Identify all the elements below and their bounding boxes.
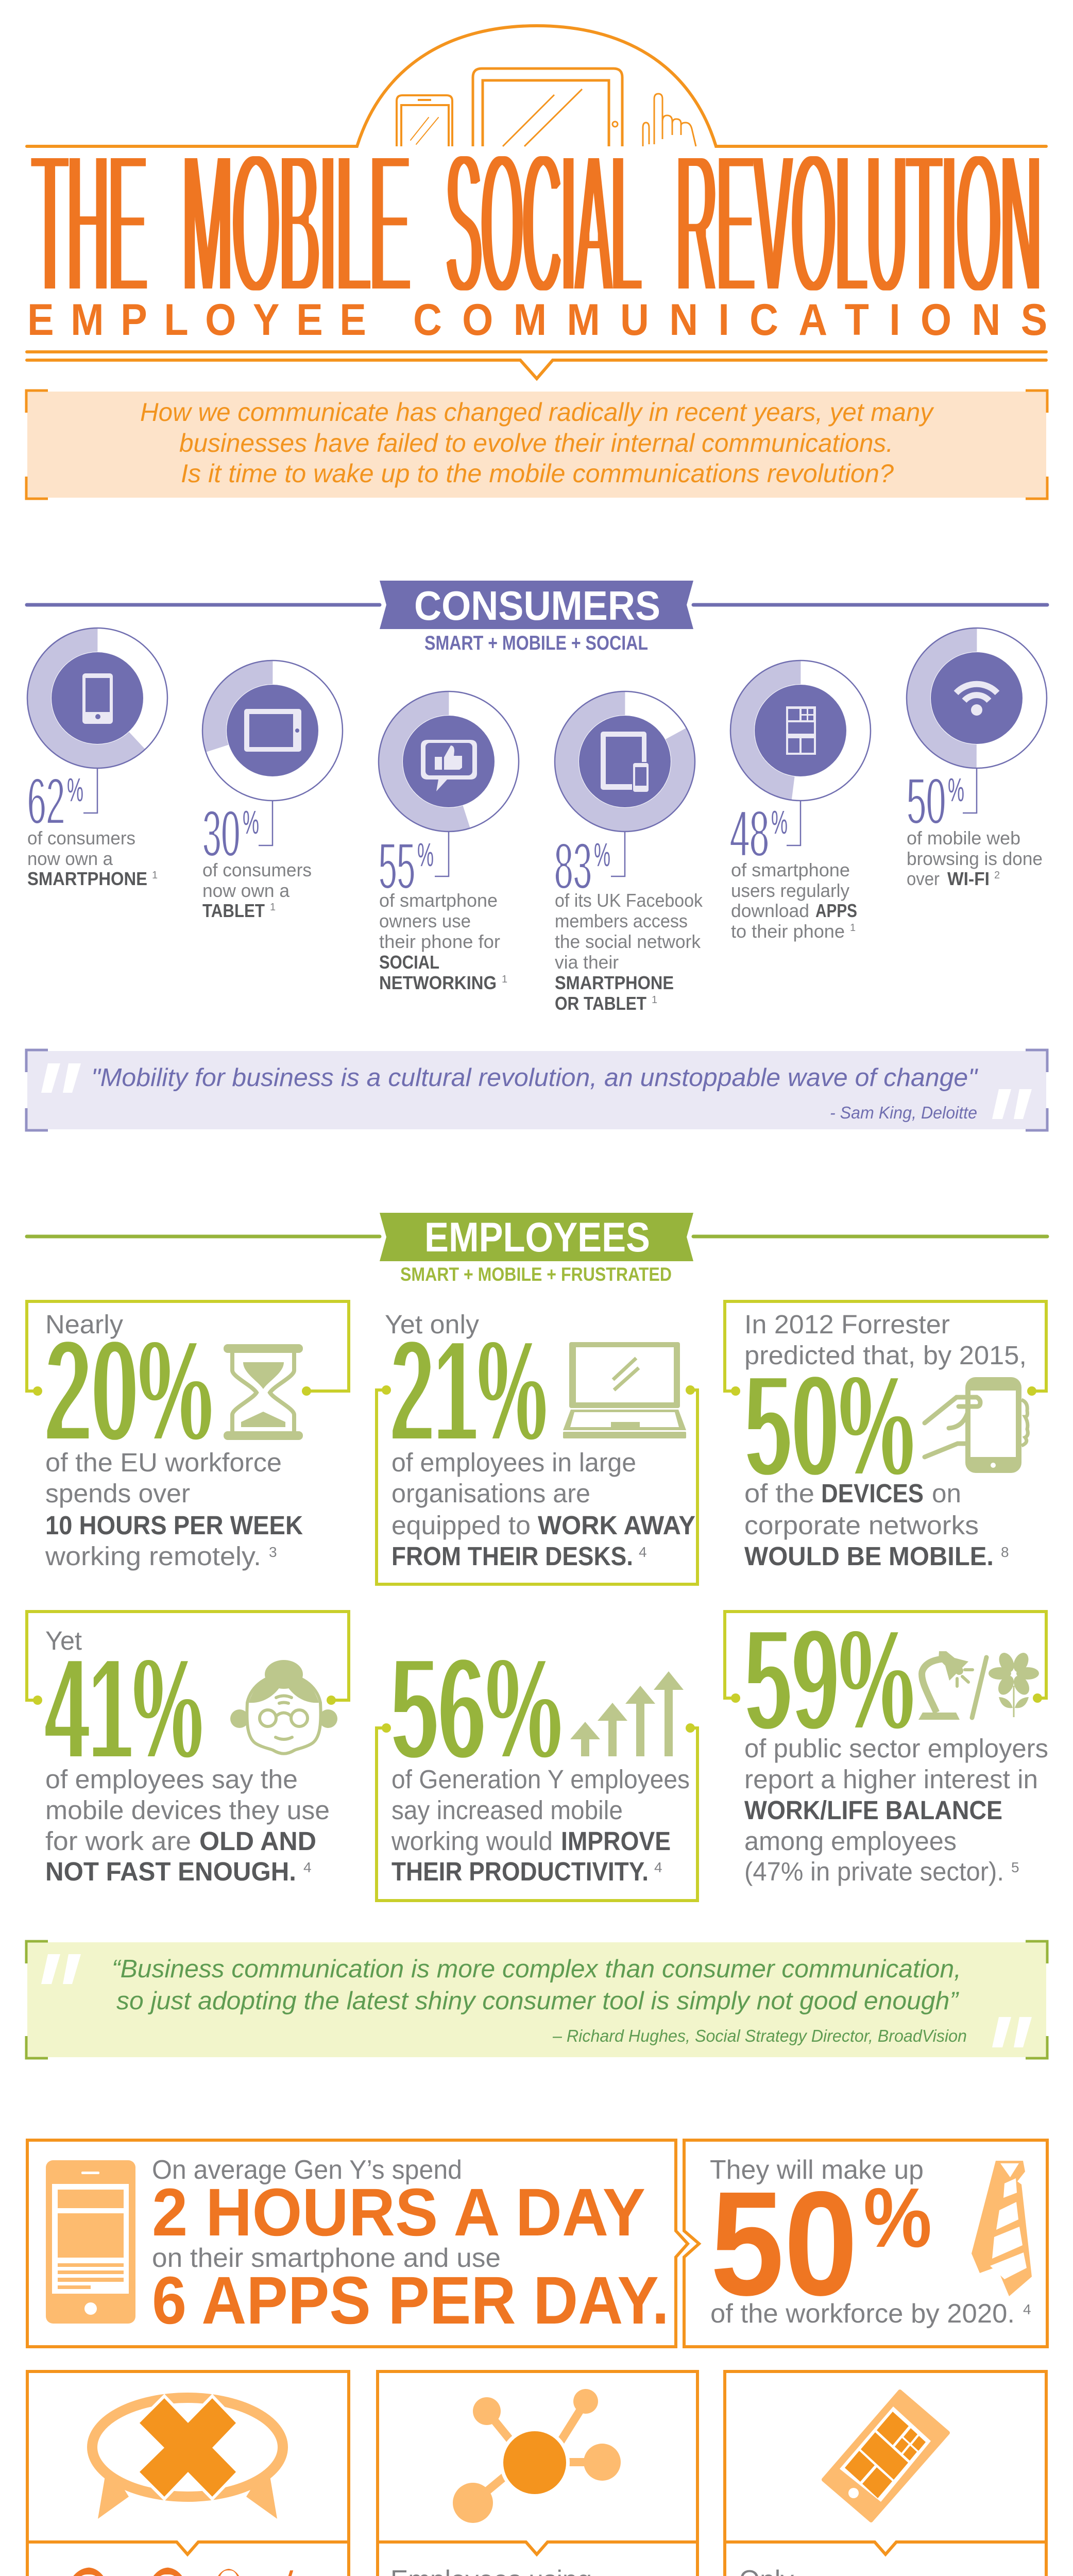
header icon: arch with phone, tablet and hand — [27, 26, 1046, 146]
intro text: businesses have failed to evolve their internal communications. — [179, 429, 893, 457]
card: 21%: Yet only — [385, 1310, 479, 1339]
card: 56%: working would — [391, 1826, 553, 1856]
stat: 83% facebook: % — [594, 836, 610, 873]
stat: 48% apps — [730, 660, 871, 942]
quote: Sam King: - Sam King, Deloitte — [830, 1103, 977, 1122]
stat: 30% tablet: 1 — [270, 902, 276, 913]
card: 20%: 3 — [269, 1544, 277, 1560]
subtitle — [27, 295, 1047, 345]
section heading: consumers: SMART + MOBILE + SOCIAL — [424, 632, 648, 654]
quote: Richard Hughes: so just adopting the latest shiny consumer tool is simply not good enough” — [116, 1987, 960, 2015]
stat: 83% facebook: via their — [555, 952, 619, 973]
stat: 62% smartphone — [27, 628, 167, 889]
card: 21%: FROM THEIR DESKS. — [391, 1541, 633, 1571]
stat: 55% social networking: % — [417, 836, 434, 873]
stat: 55% social networking: their phone for — [379, 931, 500, 952]
card: 41%: mobile devices they use — [45, 1795, 330, 1825]
card: 50% devices — [725, 1301, 1046, 1571]
section heading: employees: SMART + MOBILE + FRUSTRATED — [400, 1264, 672, 1285]
stat: 55% social networking: NETWORKING — [379, 972, 497, 993]
intro text — [140, 398, 934, 488]
card: 50% devices: of the — [744, 1479, 814, 1508]
card: 41%: for work are — [45, 1826, 191, 1856]
stat: 50% wifi: over — [907, 868, 940, 889]
stat: 55% social networking: SOCIAL — [379, 952, 439, 973]
donut 50% — [907, 628, 1047, 768]
card: 11% — [724, 2371, 1046, 2576]
card: 20% — [27, 1301, 349, 1571]
stat: 83% facebook: SMARTPHONE — [555, 972, 674, 993]
card: 41%: 4 — [303, 1859, 312, 1875]
stat: 55% social networking: of smartphone — [379, 890, 498, 911]
icon: older woman with glasses — [230, 1660, 337, 1754]
icon: rising arrows — [570, 1671, 684, 1756]
card: 50% devices: 50% — [744, 1343, 914, 1508]
card: 50% devices: In 2012 Forrester — [744, 1310, 950, 1339]
stat: 30% tablet: 30 — [202, 797, 240, 870]
card: 59%: report a higher interest in — [744, 1765, 1038, 1794]
card: 56%: 4 — [654, 1859, 662, 1875]
donut 83% — [555, 691, 695, 832]
quote: Sam King: "Mobility for business is a cultural revolution, an unstoppable wave of change" — [91, 1064, 979, 1092]
card: 41%: OLD AND — [199, 1826, 316, 1856]
intro text: Is it time to wake up to the mobile communications revolution? — [181, 459, 894, 488]
icon: hand holding phone — [925, 1377, 1028, 1473]
stat: 48% apps: 48 — [730, 797, 769, 870]
icon: phone — [46, 2160, 135, 2324]
icon: tie — [972, 2161, 1032, 2296]
stat: 50% wifi: % — [948, 771, 964, 808]
section heading: consumers: CONSUMERS — [414, 583, 660, 629]
stat: 48% apps: 1 — [850, 922, 856, 934]
card: 59%: among employees — [744, 1826, 957, 1856]
icon: speech bubbles with cross — [92, 2398, 283, 2519]
card: 50% devices: 8 — [1001, 1544, 1009, 1560]
panel: 50% of workforce: of the workforce by 2020. — [710, 2299, 1015, 2329]
stat: 48% apps: to their phone — [731, 921, 845, 942]
card: 59%: of public sector employers — [744, 1734, 1048, 1763]
card: 56%: THEIR PRODUCTIVITY. — [391, 1857, 649, 1886]
stat: 50% wifi: 2 — [994, 870, 1000, 881]
icon: hourglass — [224, 1344, 303, 1440]
header — [27, 26, 1047, 379]
panel: gen y usage: 6 APPS PER DAY. — [152, 2262, 669, 2338]
stat: 62% smartphone: now own a — [27, 848, 113, 869]
card: 50% devices: DEVICES — [821, 1479, 924, 1508]
stat: 62% smartphone: % — [67, 771, 83, 808]
card: 96% — [27, 2371, 349, 2576]
intro text: How we communicate has changed radically in recent years, yet many — [140, 398, 934, 427]
panel: gen y usage: 2 HOURS A DAY — [152, 2174, 645, 2250]
card: 56%: IMPROVE — [561, 1826, 671, 1856]
card: 50% devices: WOULD BE MOBILE. — [744, 1541, 994, 1571]
subtitle: COMMUNICATIONS — [413, 295, 1047, 345]
card: 50% devices: corporate networks — [744, 1511, 979, 1540]
card: 56%: say increased mobile — [391, 1795, 623, 1825]
stat: 30% tablet: % — [243, 804, 259, 841]
donut 30% — [202, 660, 343, 801]
stat: 62% smartphone: 1 — [152, 870, 158, 881]
stat: 50% wifi: WI-FI — [947, 868, 990, 889]
stat: 30% tablet: TABLET — [202, 900, 265, 921]
card: 56%: of Generation Y employees — [391, 1765, 690, 1794]
card: 20%: of the EU workforce — [45, 1448, 282, 1477]
stat: 50% wifi — [907, 628, 1047, 889]
panel: intro — [26, 391, 1047, 499]
card: 21%: 21% — [390, 1308, 547, 1473]
card: 21%: 4 — [639, 1544, 647, 1560]
stat: 30% tablet: of consumers — [202, 859, 312, 880]
stat: 62% smartphone: 62 — [27, 765, 65, 838]
stat: 30% tablet — [202, 660, 343, 921]
card: 21%: of employees in large — [391, 1448, 636, 1477]
stat: 48% apps: download — [731, 900, 809, 921]
stat: 48% apps: APPS — [815, 900, 857, 921]
stat: 83% facebook: the social network — [555, 931, 701, 952]
quote: Richard Hughes: “Business communication is more complex than consumer communication, — [112, 1955, 961, 1983]
icon: network nodes — [453, 2389, 621, 2523]
stat: 83% facebook: 1 — [652, 994, 657, 1006]
quote: Richard Hughes — [26, 1941, 1047, 2058]
stat: 48% apps: users regularly — [731, 880, 849, 901]
section heading: employees — [27, 1213, 1047, 1285]
icon: tilted phone — [824, 2392, 948, 2520]
stat: 55% social networking — [379, 691, 519, 993]
card: 20%: 20% — [45, 1308, 213, 1473]
main title: THE — [32, 112, 147, 335]
card: 59%: 5 — [1011, 1859, 1019, 1875]
card: 41% — [27, 1612, 349, 1886]
panel: gen y usage — [27, 2140, 688, 2347]
icon: lamp and flower — [918, 1650, 1039, 1720]
card: 50% devices: predicted that, by 2015, — [744, 1341, 1027, 1370]
donut 55% — [379, 691, 519, 832]
card: 21%: WORK AWAY — [538, 1511, 695, 1540]
icon: laptop — [563, 1342, 686, 1438]
section heading: consumers — [27, 581, 1047, 654]
stat: 50% wifi: browsing is done — [907, 848, 1043, 869]
quote: Richard Hughes: – Richard Hughes, Social Strategy Director, BroadVision — [552, 2026, 967, 2045]
panel: 50% of workforce: They will make up — [710, 2155, 924, 2185]
card: 59%: (47% in private sector). — [744, 1857, 1004, 1886]
panel: 50% of workforce: 4 — [1023, 2301, 1031, 2317]
card: 21%: equipped to — [391, 1511, 531, 1540]
stat: 83% facebook: of its UK Facebook — [555, 890, 703, 911]
quote: Sam King — [26, 1050, 1047, 1130]
section heading: employees: EMPLOYEES — [424, 1214, 650, 1261]
card: 59%: WORK/LIFE BALANCE — [744, 1795, 1002, 1825]
card: 20%: spends over — [45, 1479, 190, 1508]
card: 20%: Nearly — [45, 1310, 124, 1339]
card: 21%: organisations are — [391, 1479, 590, 1508]
stat: 55% social networking: 1 — [502, 974, 507, 985]
card: 59%: 59% — [744, 1597, 914, 1762]
donut 62% — [27, 628, 167, 768]
stat: 55% social networking: owners use — [379, 910, 471, 931]
card: 20%: working remotely. — [45, 1541, 261, 1571]
panel: 50% of workforce: 50 — [710, 2161, 858, 2327]
card: 20%: 10 HOURS PER WEEK — [45, 1511, 303, 1540]
card: 56% — [377, 1626, 697, 1901]
card: 41%: Yet — [45, 1626, 82, 1655]
panel: 50% of workforce: % — [863, 2171, 932, 2265]
card: 41%: 41% — [45, 1626, 203, 1791]
stat: 55% social networking: 55 — [379, 829, 415, 903]
stat: 83% facebook: members access — [555, 910, 688, 931]
card: 59% — [725, 1597, 1048, 1886]
card: 39% — [377, 2371, 697, 2576]
stat: 62% smartphone: SMARTPHONE — [27, 868, 147, 889]
stat: 50% wifi: of mobile web — [907, 827, 1020, 849]
subtitle: EMPLOYEE — [27, 295, 366, 345]
card: 21% — [377, 1308, 697, 1584]
card: 56%: 56% — [390, 1626, 562, 1791]
panel: gen y usage: on their smartphone and use — [152, 2243, 501, 2273]
stat: 50% wifi: 50 — [907, 765, 946, 838]
card: 41%: NOT FAST ENOUGH. — [45, 1857, 296, 1886]
stat: 83% facebook — [554, 691, 703, 1014]
stat: 48% apps: % — [771, 804, 788, 841]
stat: 48% apps: of smartphone — [731, 859, 850, 880]
stat: 83% facebook: OR TABLET — [555, 993, 646, 1014]
panel: gen y usage: On average Gen Y’s spend — [152, 2155, 462, 2185]
donut 48% — [730, 660, 871, 801]
panel: 50% of workforce — [684, 2140, 1047, 2347]
main title: MOBILE — [182, 112, 410, 335]
card: 50% devices: on — [932, 1479, 961, 1508]
stat: 83% facebook: 83 — [554, 829, 592, 903]
card: 41%: of employees say the — [45, 1765, 298, 1794]
stat: 62% smartphone: of consumers — [27, 827, 135, 849]
stat: 30% tablet: now own a — [202, 880, 290, 901]
header divider with pointer — [27, 352, 1046, 379]
